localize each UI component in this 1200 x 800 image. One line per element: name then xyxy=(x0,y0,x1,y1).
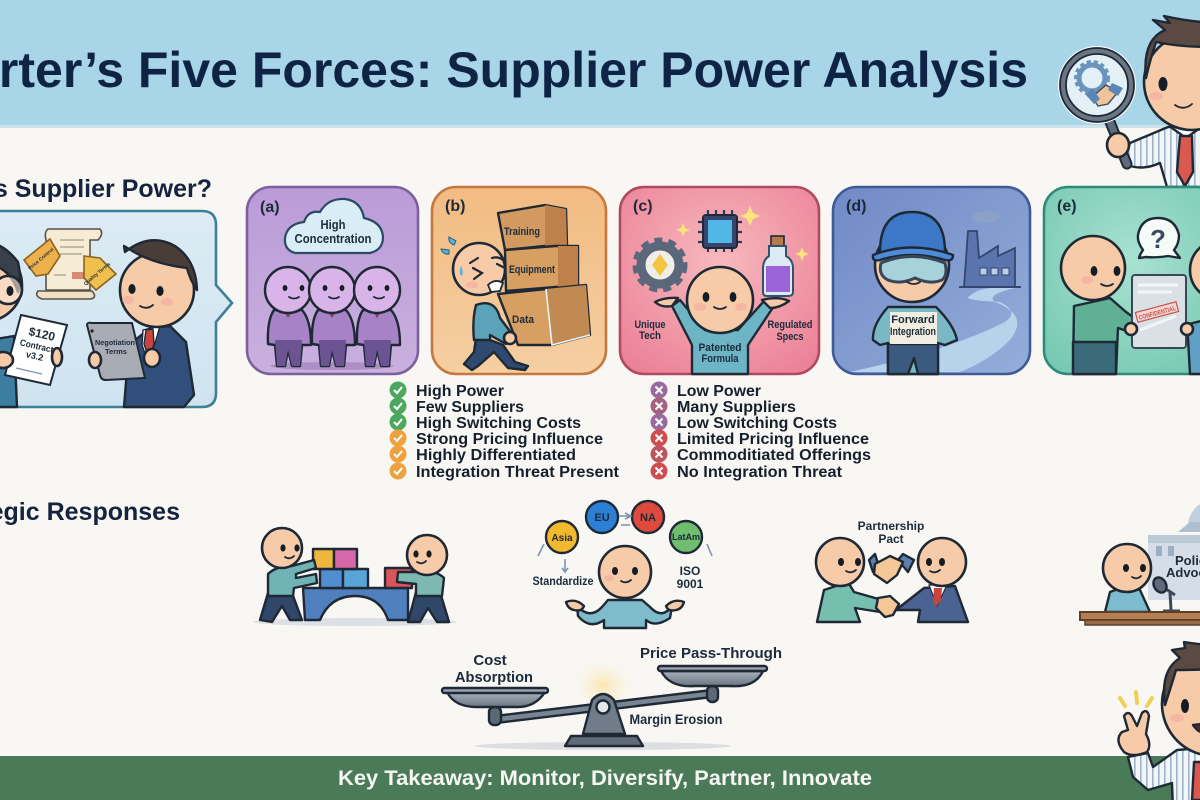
vial icon xyxy=(763,236,793,296)
label: patented formula: Formula xyxy=(702,353,739,365)
contract sheet: Contract xyxy=(19,337,54,355)
label: regulated specs xyxy=(768,319,812,343)
label: partnership pact: Pact xyxy=(878,532,904,546)
person with glasses and contract xyxy=(0,243,67,407)
label: ISO 9001: ISO xyxy=(680,564,700,578)
label: unique tech: Tech xyxy=(639,330,661,342)
label: standardize: Standardize xyxy=(532,576,594,588)
cross item 1: Low Power xyxy=(677,383,761,400)
cross item 4: Limited Pricing Influence xyxy=(677,431,869,448)
ball: EU xyxy=(586,501,618,533)
scale shadow xyxy=(475,742,731,750)
negotiation tablet: Negotiation xyxy=(95,338,135,347)
label: partnership pact: Partnership xyxy=(858,519,924,533)
shirt label: forward integration: Integration xyxy=(890,326,936,338)
panel c frame xyxy=(620,187,819,374)
supplier one xyxy=(265,267,311,366)
label: margin erosion: Margin Erosion xyxy=(630,711,722,727)
check item 1: High Power xyxy=(416,383,504,400)
confidential packet: CONFIDENTIAL xyxy=(1138,305,1177,322)
ball: NA: NA xyxy=(640,512,656,524)
checklist: low power xyxy=(650,382,871,481)
supplier two xyxy=(309,267,355,366)
victory hand xyxy=(1118,711,1149,755)
check item 3: High Switching Costs xyxy=(416,415,581,432)
panel d: forward integration xyxy=(833,187,1030,374)
mascot: victory sign xyxy=(1118,642,1200,800)
label: price pass-through: Price Pass-Through xyxy=(640,645,782,662)
tie xyxy=(1192,762,1200,800)
label: cost absorption: Cost xyxy=(473,652,507,669)
left person xyxy=(1061,236,1140,374)
cross item 1 xyxy=(650,382,761,400)
right pan xyxy=(658,666,767,702)
panel b label: (b) xyxy=(445,198,465,215)
cloud with label: Concentration xyxy=(294,232,372,246)
jacket xyxy=(473,303,512,344)
mascot head xyxy=(1144,16,1200,130)
box: data xyxy=(498,285,590,345)
ball: NA xyxy=(632,501,664,533)
label: patented formula xyxy=(698,342,742,365)
worker xyxy=(873,212,957,374)
question bubble xyxy=(1138,218,1180,258)
box: equipment xyxy=(505,246,578,291)
label: cost absorption xyxy=(455,652,533,686)
panel b frame xyxy=(432,187,606,374)
three suppliers xyxy=(265,267,400,370)
question bubble: ? xyxy=(1150,224,1166,254)
microphone xyxy=(1151,575,1180,611)
confidential packet xyxy=(1125,275,1186,348)
box: data: Data xyxy=(512,314,535,326)
panel e frame xyxy=(1044,187,1200,374)
trousers xyxy=(464,338,528,370)
panel e: information asymmetry xyxy=(1044,187,1200,374)
mascot shirt and tie xyxy=(1123,127,1200,187)
mascot: analyst with magnifying glass xyxy=(1058,16,1200,187)
beam xyxy=(495,690,712,723)
panel: what is supplier power scene xyxy=(0,211,232,407)
panel a frame xyxy=(247,187,418,374)
ball: LatAm xyxy=(670,521,702,553)
checklist: high power xyxy=(390,382,620,481)
panel background with pointer xyxy=(0,211,232,407)
person left with teal shirt xyxy=(816,538,882,622)
contract sheet xyxy=(5,315,67,385)
check item 6: Integration Threat Present xyxy=(416,464,620,481)
footer banner xyxy=(0,756,1200,800)
juggling motion arrows xyxy=(538,513,712,572)
sparkles xyxy=(676,206,809,261)
chip icon xyxy=(698,210,742,252)
strategy: policy advocacy xyxy=(1080,500,1200,625)
cross item 5: Commoditiated Offerings xyxy=(677,447,871,464)
check item 5: Highly Differentiated xyxy=(416,447,576,464)
shirt label: forward integration xyxy=(890,312,937,344)
cross item 3: Low Switching Costs xyxy=(677,415,837,432)
wooden table xyxy=(1080,612,1200,625)
price tag: Price Control xyxy=(27,246,56,272)
magnifying glass xyxy=(1058,46,1136,164)
strategy: balance scale xyxy=(442,645,782,750)
label: partnership pact xyxy=(858,519,924,546)
panel c: differentiated inputs xyxy=(620,187,819,374)
fulcrum xyxy=(565,694,643,746)
panel b: high switching costs xyxy=(432,187,606,374)
label: unique tech: Unique xyxy=(634,319,666,331)
floating handshake icon xyxy=(869,554,914,583)
person with tablet xyxy=(87,240,197,407)
label: regulated specs: Specs xyxy=(776,331,804,343)
label: ISO 9001: 9001 xyxy=(677,577,704,591)
government building xyxy=(1148,500,1200,600)
panel a: high concentration xyxy=(247,187,418,374)
panel d label: (d) xyxy=(846,198,866,215)
scale glow xyxy=(568,655,638,715)
cloud with label: High xyxy=(320,218,346,232)
person left xyxy=(260,528,317,622)
head xyxy=(1162,642,1200,756)
panel a label: (a) xyxy=(260,199,280,216)
factory xyxy=(959,211,1021,287)
sparkle lines xyxy=(1120,692,1152,706)
ball: EU: EU xyxy=(594,512,610,524)
right person xyxy=(1181,240,1200,374)
panel e label: (e) xyxy=(1057,198,1077,215)
supplier three xyxy=(354,267,400,366)
box: equipment: Equipment xyxy=(509,264,555,276)
left pan xyxy=(442,688,548,725)
quality tag xyxy=(83,256,116,290)
cross item 2: Many Suppliers xyxy=(677,399,796,416)
check item 2: Few Suppliers xyxy=(416,399,524,416)
winding road xyxy=(850,288,1017,372)
coloured blocks xyxy=(313,549,412,588)
strategy: diversify and standardize xyxy=(532,501,712,628)
footer takeaway text: Key Takeaway: Monitor, Diversify, Partner, Innovate xyxy=(338,767,872,790)
person holding items xyxy=(655,267,789,374)
gear icon: unique tech xyxy=(635,240,685,290)
check item 4: Strong Pricing Influence xyxy=(416,431,603,448)
face xyxy=(453,243,505,295)
price tag xyxy=(24,239,60,276)
label: patented formula: Patented xyxy=(698,342,742,354)
negotiation tablet xyxy=(87,323,145,380)
contract sheet: v3.2 xyxy=(25,349,44,363)
strategy: building blocks xyxy=(253,528,457,626)
shirt label: forward integration: Forward xyxy=(891,314,935,326)
label: unique tech xyxy=(634,319,666,342)
person at table xyxy=(1103,544,1151,612)
quality tag: Quality Terms xyxy=(83,261,112,287)
cross item 6: No Integration Threat xyxy=(677,464,843,481)
strategy: partnership pact xyxy=(816,519,968,622)
ball: LatAm: LatAm xyxy=(672,532,700,542)
person right in suit xyxy=(896,538,968,622)
panel c label: (c) xyxy=(633,198,653,215)
contract scroll xyxy=(37,229,102,299)
panel d frame xyxy=(833,187,1030,374)
main handshake xyxy=(876,596,899,617)
juggling person xyxy=(566,546,684,628)
negotiation tablet: Terms xyxy=(105,347,127,356)
label: regulated specs: Regulated xyxy=(768,319,812,331)
label: ISO 9001 xyxy=(677,564,704,591)
stone bridge xyxy=(303,588,408,620)
ball: Asia: Asia xyxy=(551,533,573,544)
strained person xyxy=(441,237,528,370)
shirt sleeve xyxy=(1128,745,1200,800)
box: training xyxy=(498,205,567,250)
header banner xyxy=(0,0,1200,128)
label: cost absorption: Absorption xyxy=(455,669,533,686)
cloud with label xyxy=(285,199,383,253)
ball: Asia xyxy=(546,521,578,553)
contract sheet: $120 xyxy=(27,324,57,344)
box: training: Training xyxy=(504,226,540,238)
label: policy advocacy xyxy=(1166,553,1200,580)
person right xyxy=(397,535,449,622)
